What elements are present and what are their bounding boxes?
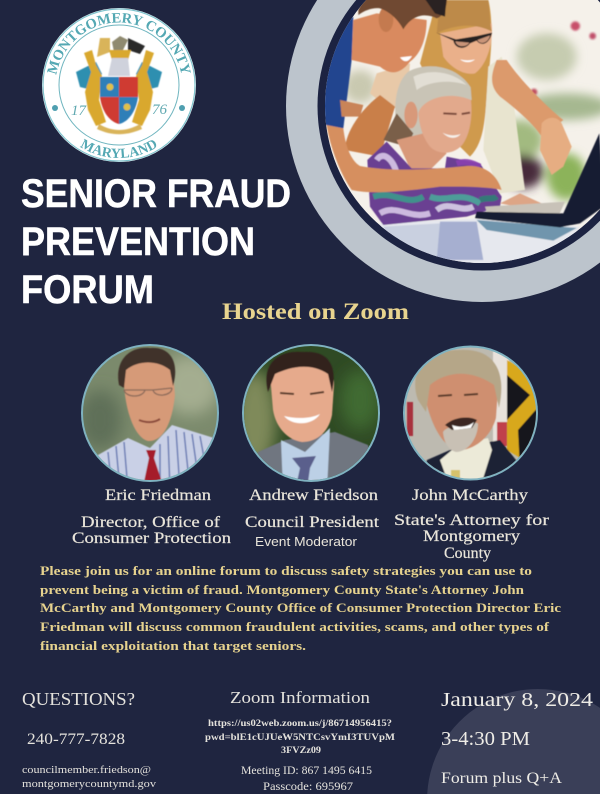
woman face <box>418 96 471 153</box>
speaker: Andrew Friedson: Andrew Friedson <box>249 487 378 504</box>
photo: family using laptop <box>313 0 600 273</box>
decorative lighter circle, lower right <box>427 689 600 794</box>
girl hair back <box>420 0 491 157</box>
county seal logo <box>42 8 196 162</box>
speaker: Andrew Friedson: Event Moderator <box>255 535 357 549</box>
photo ring and family photo <box>286 0 600 302</box>
woman hair <box>395 66 472 140</box>
speaker: John McCarthy: John McCarthy <box>412 487 528 504</box>
boy neck and face <box>352 13 427 72</box>
speaker: Eric Friedman: Eric Friedman <box>105 487 211 504</box>
boy shirt <box>317 17 353 128</box>
boy arm <box>327 125 502 192</box>
coat of arms <box>76 36 162 134</box>
girl right arm <box>492 60 563 137</box>
girl dress <box>370 63 410 110</box>
speaker: John McCarthy: State's Attorney for <box>394 512 550 529</box>
crest <box>97 38 110 57</box>
subheading: hosted on zoom: Hosted on Zoom <box>222 299 409 324</box>
girl face <box>440 23 492 74</box>
zoom information: Passcode: 695967 <box>263 781 353 793</box>
seal text: Montgomery County: MONTGOMERY COUNTY <box>47 13 191 75</box>
contact details: montgomerycountymd.gov <box>22 778 157 790</box>
supporters <box>76 62 102 90</box>
portrait: Andrew Friedson <box>242 344 380 482</box>
event date and time: January 8, 2024 <box>441 689 593 711</box>
woman blouse <box>367 142 502 225</box>
speaker: Eric Friedman <box>72 487 231 547</box>
event date and time: Forum plus Q+A <box>441 770 562 787</box>
title: SENIOR FRAUD <box>21 172 291 216</box>
event description: Please join us for an online forum to discuss safety strategies you can use to <box>40 563 532 578</box>
woman neck <box>397 133 447 170</box>
speaker: John McCarthy <box>394 487 550 562</box>
motto scroll <box>97 124 142 134</box>
seal text: Maryland: MARYLAND <box>80 138 156 158</box>
zoom information: 3FVZz09 <box>281 746 321 756</box>
speaker: Eric Friedman: Director, Office of <box>81 514 221 531</box>
portrait: Eric Friedman <box>78 344 220 490</box>
seal year <box>71 102 168 119</box>
contact details: 240-777-7828 <box>27 731 125 748</box>
title: FORUM <box>21 268 154 312</box>
speaker: Andrew Friedson <box>245 487 380 549</box>
speaker: Eric Friedman: Consumer Protection <box>72 530 231 547</box>
zoom information: Meeting ID: 867 1495 6415 <box>241 765 372 777</box>
title: PREVENTION <box>21 220 255 264</box>
contact details: councilmember.friedson@ <box>22 764 151 776</box>
zoom information <box>205 688 395 793</box>
table <box>380 218 580 267</box>
zoom information: Zoom Information <box>230 688 371 707</box>
event date and time: 3-4:30 PM <box>441 728 530 750</box>
speaker: John McCarthy: County <box>444 545 491 562</box>
zoom information: https://us02web.zoom.us/j/86714956415? <box>208 719 392 729</box>
seal dots <box>52 105 185 111</box>
event date and time <box>441 689 593 787</box>
boy forearm behind <box>340 100 363 117</box>
event description: Friedman will discuss common fraudulent activities, scams, and other types of <box>40 619 550 634</box>
event description: prevent being a victim of fraud. Montgomery County State's Attorney John <box>40 582 525 597</box>
contact details: QUESTIONS? <box>22 689 135 709</box>
shield <box>100 77 119 97</box>
girl left arm <box>345 95 395 157</box>
event description: McCarthy and Montgomery County Office of Consumer Protection Director Eric <box>40 600 561 615</box>
event description <box>40 563 561 653</box>
seal year: 17 <box>71 103 88 119</box>
woman hand <box>500 193 542 207</box>
laptop <box>484 202 565 214</box>
zoom information: pwd=blE1cUJUeW5NTCsvYmI3TUVpM <box>205 733 395 743</box>
speaker: Andrew Friedson: Council President <box>245 514 380 531</box>
event description: financial exploitation that target seniors. <box>40 638 306 653</box>
portrait: John McCarthy <box>403 346 538 480</box>
seal year: 76 <box>152 102 168 118</box>
contact details <box>22 689 157 790</box>
speaker: John McCarthy: Montgomery <box>423 528 520 545</box>
title <box>21 172 291 312</box>
